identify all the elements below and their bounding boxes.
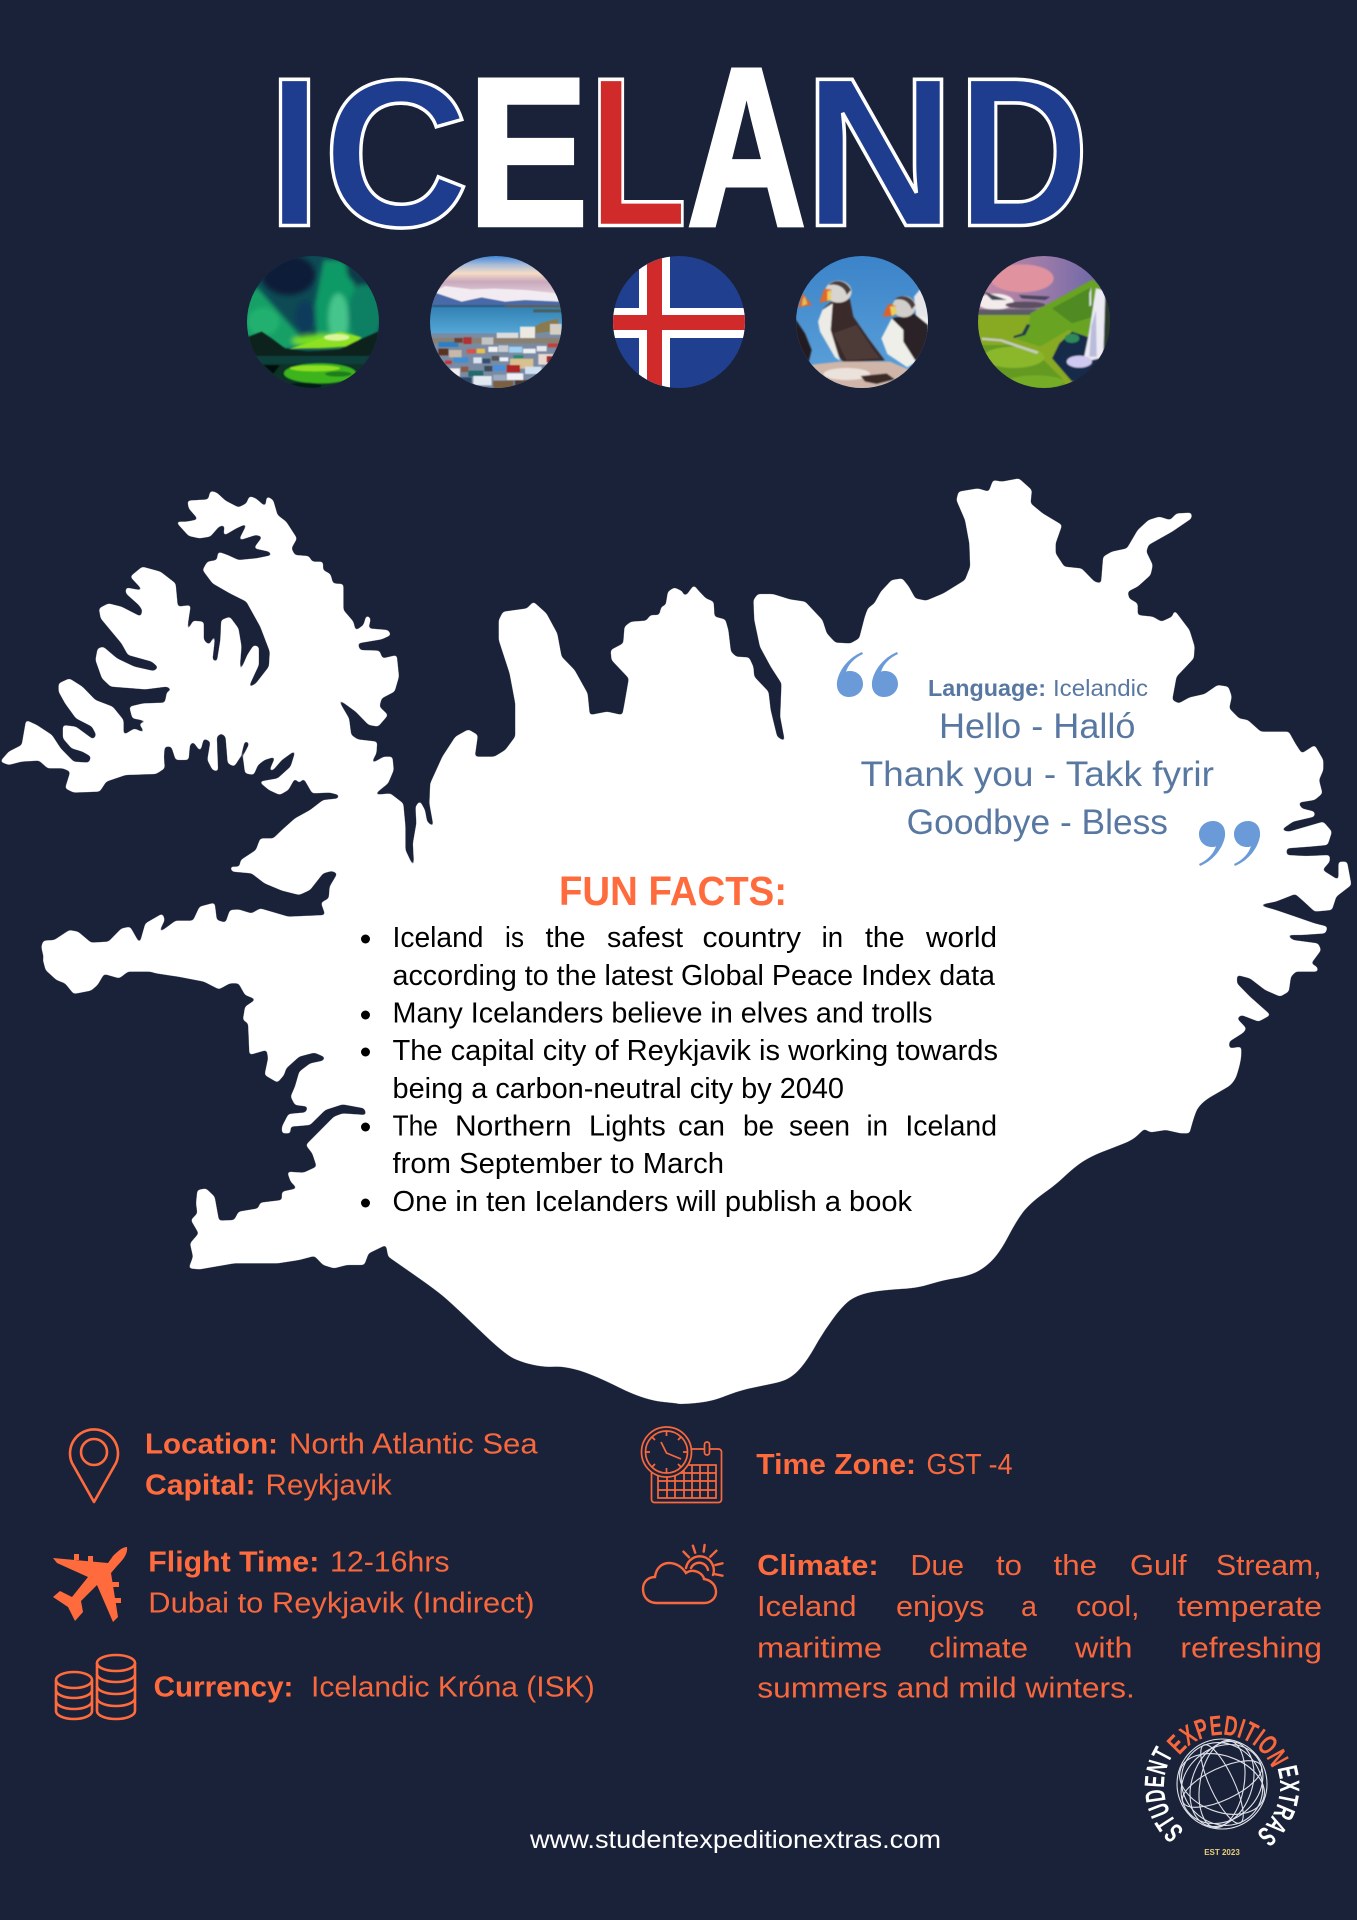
fun facts list: seen: [789, 1110, 850, 1142]
flight block: Dubai to Reykjavik (Indirect): [148, 1588, 535, 1620]
fun facts list: world: [925, 922, 997, 954]
icon: closing quote: [1199, 821, 1260, 866]
logo: Student Expedition Extras: EXPEDITION: [1166, 1716, 1289, 1768]
location block: Capital:: [145, 1469, 256, 1501]
climate block: climate: [929, 1632, 1028, 1664]
icon: clock and calendar: [642, 1427, 722, 1502]
currency block: Icelandic Króna (ISK): [311, 1672, 595, 1704]
language panel: Thank you - Takk fyrir: [860, 755, 1214, 794]
climate block: Stream,: [1216, 1550, 1322, 1582]
title: ICELAND: N: [803, 33, 956, 271]
fun facts list: in: [822, 922, 843, 954]
location block: Reykjavik: [266, 1469, 392, 1501]
fun facts list: Many Icelanders believe in elves and trolls: [392, 998, 932, 1030]
climate block: Climate:: [757, 1550, 879, 1582]
climate block: Iceland: [757, 1591, 856, 1623]
currency block: Currency:: [154, 1672, 293, 1704]
time zone block: GST -4: [926, 1449, 1012, 1481]
logo: Student Expedition Extras: [1144, 1716, 1300, 1857]
location block: [70, 1428, 539, 1502]
title: ICELAND: [268, 21, 1089, 275]
fun facts list: safest: [607, 922, 683, 954]
fun facts list: Iceland: [392, 922, 484, 954]
fun facts list: can: [678, 1110, 725, 1142]
climate block: to: [996, 1550, 1022, 1582]
time zone block: Time Zone:: [756, 1449, 916, 1481]
globe wireframe: [1164, 1726, 1280, 1842]
language panel: Hello - Halló: [939, 707, 1136, 746]
title: ICELAND: A: [686, 21, 807, 275]
climate block: cool,: [1076, 1591, 1140, 1623]
icon: opening quote: [837, 652, 898, 697]
photo: northern lights: [247, 256, 379, 388]
climate block: maritime: [757, 1632, 882, 1664]
currency block: [56, 1655, 595, 1719]
logo: Student Expedition Extras: EXTRAS: [1258, 1765, 1300, 1846]
fun facts list: in: [866, 1110, 888, 1142]
flight block: 12-16hrs: [330, 1547, 450, 1579]
fun facts list: the: [546, 922, 586, 954]
fun facts list: The: [392, 1110, 438, 1142]
fun facts list: The capital city of Reykjavik is working towards: [392, 1035, 998, 1067]
website url: www.studentexpeditionextras.com: [529, 1826, 941, 1854]
location block: Location:: [145, 1428, 278, 1460]
fun facts list: be: [743, 1110, 774, 1142]
language panel: Goodbye - Bless: [907, 803, 1168, 842]
fun facts list: the: [865, 922, 904, 954]
icon: coin stacks: [56, 1655, 135, 1719]
title: ICELAND: C: [323, 35, 469, 271]
title: ICELAND: I: [268, 35, 322, 271]
title: ICELAND: E: [467, 33, 589, 271]
climate block: enjoys: [896, 1591, 984, 1623]
location block: North Atlantic Sea: [289, 1428, 539, 1460]
language panel: Icelandic: [1053, 675, 1148, 701]
fun facts list: [361, 922, 998, 1218]
climate block: a: [1021, 1591, 1038, 1623]
fun facts list: from September to March: [392, 1148, 724, 1180]
climate block: Gulf: [1130, 1550, 1187, 1582]
climate block: temperate: [1177, 1591, 1322, 1623]
fun facts list: country: [702, 922, 802, 954]
map of Iceland: [0, 478, 1351, 1404]
photo: waterfall: [978, 256, 1110, 388]
fun facts panel: [361, 868, 998, 1218]
climate block: [643, 1545, 1322, 1704]
climate block: the: [1054, 1550, 1097, 1582]
fun facts list: One in ten Icelanders will publish a book: [392, 1186, 913, 1218]
title: ICELAND: L: [589, 33, 687, 271]
language panel: [837, 652, 1260, 866]
flight block: [53, 1547, 534, 1622]
icon: cloud and sun: [643, 1545, 722, 1603]
climate block: with: [1074, 1632, 1132, 1664]
logo: Student Expedition Extras: STUDENT: [1144, 1745, 1182, 1842]
fun facts list: Iceland: [905, 1110, 997, 1142]
photo: puffins: [796, 256, 928, 388]
climate block: refreshing: [1180, 1632, 1322, 1664]
fun facts list: being a carbon-neutral city by 2040: [392, 1073, 844, 1105]
icon: airplane: [53, 1547, 127, 1622]
logo: Student Expedition Extras: EST 2023: [1204, 1848, 1240, 1857]
icon: location pin: [70, 1429, 118, 1502]
heading: fun facts: FUN FACTS:: [559, 868, 787, 914]
fun facts list: Lights: [589, 1110, 666, 1142]
fun facts list: Northern: [455, 1110, 572, 1142]
fun facts list: is: [505, 922, 524, 954]
climate block: Due: [910, 1550, 964, 1582]
climate block: summers and mild winters.: [757, 1672, 1135, 1704]
photo row: [247, 256, 1110, 388]
language panel: Language:: [928, 675, 1046, 701]
icon: Icelandic flag: [613, 256, 745, 388]
flight block: Flight Time:: [148, 1547, 319, 1579]
title: ICELAND: D: [957, 34, 1089, 271]
photo: Reykjavik harbour: [430, 256, 562, 388]
time zone block: [642, 1427, 1012, 1502]
fun facts list: according to the latest Global Peace Index data: [392, 960, 995, 992]
